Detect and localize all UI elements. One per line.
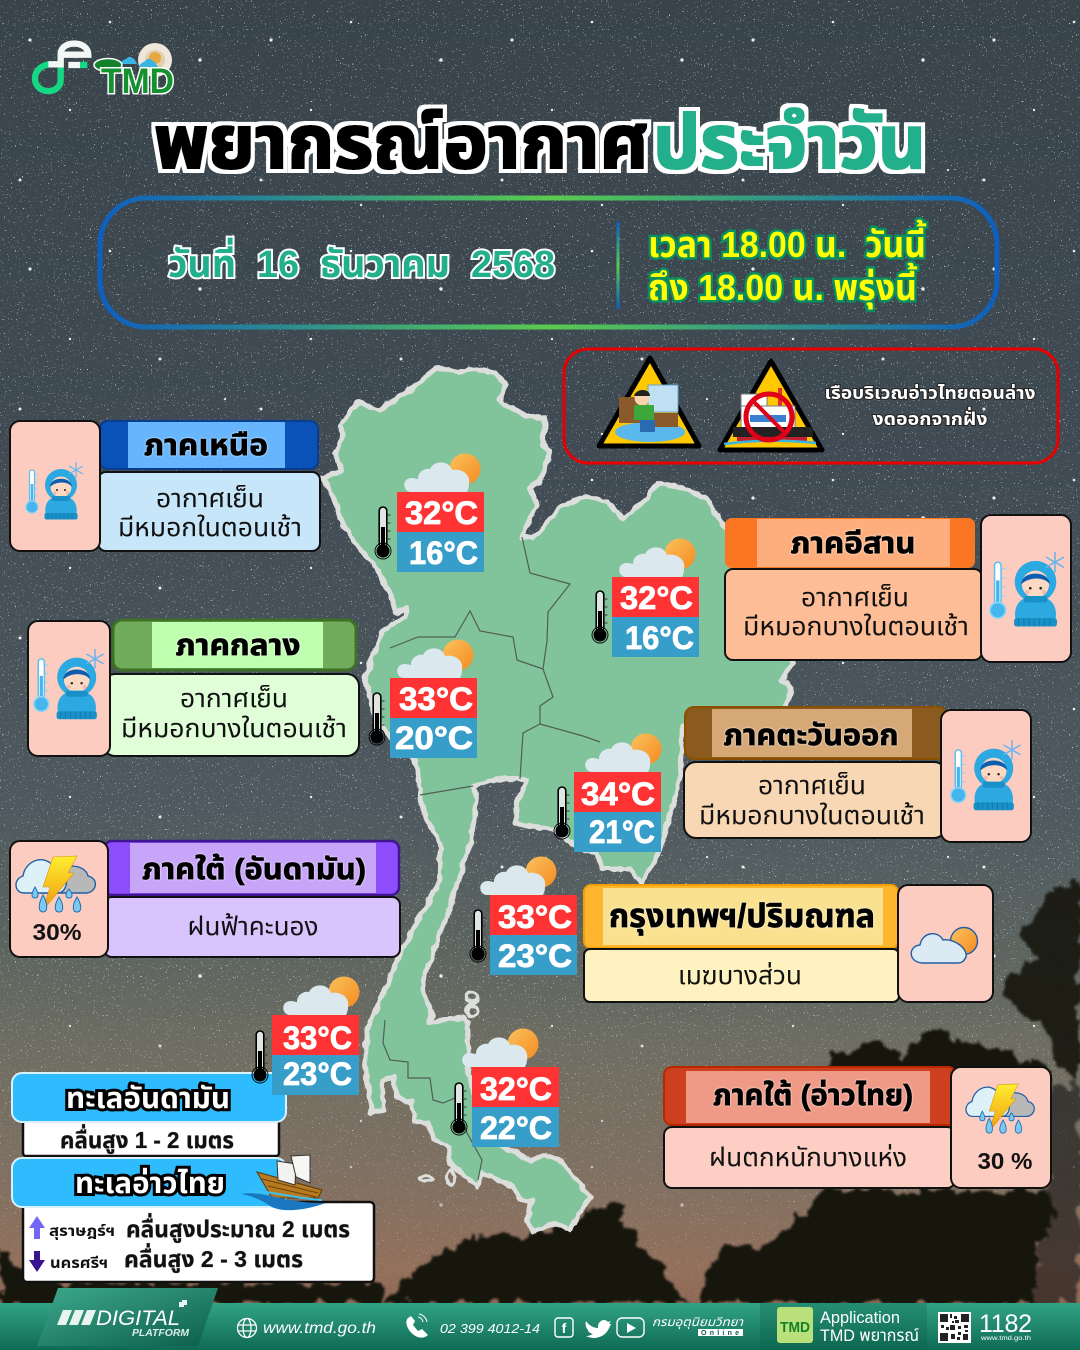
wordmark TMD: TMD [101,62,174,101]
temperature: east: 21°C [589,814,655,850]
title: ประจำวัน [653,100,926,184]
description [118,483,302,542]
footer [0,1288,1080,1350]
icon: no boats warning [720,361,822,450]
temperature: east: 34°C [581,776,655,812]
icon: ship [241,1155,326,1210]
description: ฝนฟ้าคะนอง [188,911,318,941]
temperature: Gulf coast [451,1028,559,1147]
heading: ภาคตะวันออก [724,720,898,752]
temperature: Bangkok: 23°C [498,938,572,974]
heading: ทะเลอ่าวไทย [75,1168,225,1200]
panel: Bangkok [584,885,993,1002]
date: วันที่ 16 ธันวาคม 2568 [168,237,555,286]
title [154,100,926,184]
icon: arrow up [29,1216,45,1239]
panel: central [28,620,359,756]
temperature: east [554,734,662,852]
icon card: cold [28,621,110,756]
application panel: Application [820,1308,900,1327]
hotline 1182: 1182 [979,1310,1032,1338]
warning text [824,383,1036,429]
wave height: Surat Thani: คลื่นสูงประมาณ 2 เมตร [126,1213,350,1243]
temperature: central: 20°C [395,720,473,756]
valid period: ถึง 18.00 น. พรุ่งนี้ [648,262,918,309]
panel: north [10,421,320,551]
QR code [938,1312,971,1343]
temperature: Andaman coast [252,976,360,1095]
heading: ภาคใต้ (อันดามัน) [142,854,366,886]
temperature: north: 16°C [409,535,478,571]
temperature: Gulf coast: 32°C [480,1071,552,1107]
description: อากาศเย็น [180,683,288,713]
description: อากาศเย็น [801,582,909,612]
description: มีหมอกบางในตอนเช้า [699,800,925,830]
warning text: เรือบริเวณอ่าวไทยตอนล่าง [824,383,1036,403]
icon card: cold [10,421,100,551]
icon card: storm [10,841,108,957]
department name: กรมอุตุนิยมวิทยา [652,1315,744,1330]
panel: south Andaman [10,841,400,957]
heading: ทะเลอันดามัน [66,1083,230,1115]
description: มีหมอกในตอนเช้า [118,512,302,542]
description [121,683,347,743]
description: อากาศเย็น [758,770,866,800]
application panel: TMD [780,1319,810,1336]
wave height: Nakhon Si Thammarat: คลื่นสูง 2 - 3 เมตร [124,1243,303,1273]
label: Surat Thani: สุราษฎร์ฯ [49,1223,115,1240]
temperature: central: 33°C [399,681,473,717]
social icons: f [562,1320,567,1336]
heading: ภาคอีสาน [790,528,916,560]
description: เมฆบางส่วน [678,960,802,990]
date and validity panel [100,198,997,327]
department name: Online [701,1330,739,1337]
logo: TMD [35,43,174,101]
temperature: Andaman coast: 23°C [283,1056,352,1092]
website [238,1318,376,1338]
temperature: northeast: 16°C [625,620,694,656]
application panel [760,1303,927,1350]
description [699,770,925,830]
heading: ภาคกลาง [176,630,300,662]
warning text: งดออกจากฝั่ง [872,407,988,429]
icon card: storm: 30 % [978,1148,1032,1174]
warning panel [564,349,1058,463]
description [743,582,969,641]
icon card: cold [941,710,1031,842]
department name [652,1315,744,1337]
digital platform badge: PLATFORM [132,1328,190,1339]
digital platform badge [37,1288,218,1346]
description: มีหมอกบางในตอนเช้า [743,611,969,641]
temperature: Gulf coast: 22°C [480,1110,552,1146]
panel: south Gulf [664,1067,1051,1188]
phone [406,1314,540,1338]
phone: 02 399 4012-14 [440,1321,540,1336]
icon card: partly cloudy [898,885,993,1002]
heading: ภาคเหนือ [144,430,268,462]
heading: ภาคใต้ (อ่าวไทย) [713,1080,913,1112]
temperature: central [369,640,477,758]
label: Nakhon Si Thammarat: นครศรีฯ [50,1255,108,1272]
panel: Andaman sea [12,1073,286,1156]
icon card: storm: 30% [32,919,82,945]
tree silhouettes [0,883,1080,1303]
description: มีหมอกบางในตอนเช้า [121,713,347,743]
website: www.tmd.go.th [263,1320,376,1337]
application panel: TMD พยากรณ์ [820,1326,919,1345]
icon: arrow down [29,1251,45,1272]
panel: northeast [725,515,1071,662]
icon: flood warning [599,358,699,446]
digital platform badge: DIGITAL [96,1307,180,1330]
valid period [648,219,927,309]
valid period: เวลา 18.00 น. วันนี้ [648,219,927,265]
temperature: north: 32°C [405,495,478,531]
wave height: คลื่นสูง 1 - 2 เมตร [60,1124,234,1154]
description: ฝนตกหนักบางแห่ง [709,1142,907,1172]
map of Thailand [322,367,793,1232]
temperature: northeast [592,538,699,657]
icon card: storm [951,1067,1051,1188]
hotline 1182: www.tmd.go.th [980,1335,1031,1342]
icon card: cold [981,515,1071,662]
temperature: Bangkok [470,856,577,975]
panel: east [684,707,1031,842]
temperature: northeast: 32°C [620,580,693,616]
social icons [555,1318,644,1338]
temperature: Bangkok: 33°C [498,899,572,935]
heading: กรุงเทพฯ/ปริมณฑล [609,897,875,936]
panel: Gulf of Thailand sea [12,1155,374,1282]
temperature: Andaman coast: 33°C [283,1020,352,1056]
temperature: north [375,454,484,572]
icon: ministry mark [35,44,88,91]
title: พยากรณ์อากาศ [154,100,649,184]
icon: TMD sun and cloud [94,43,172,77]
description: อากาศเย็น [156,483,264,513]
